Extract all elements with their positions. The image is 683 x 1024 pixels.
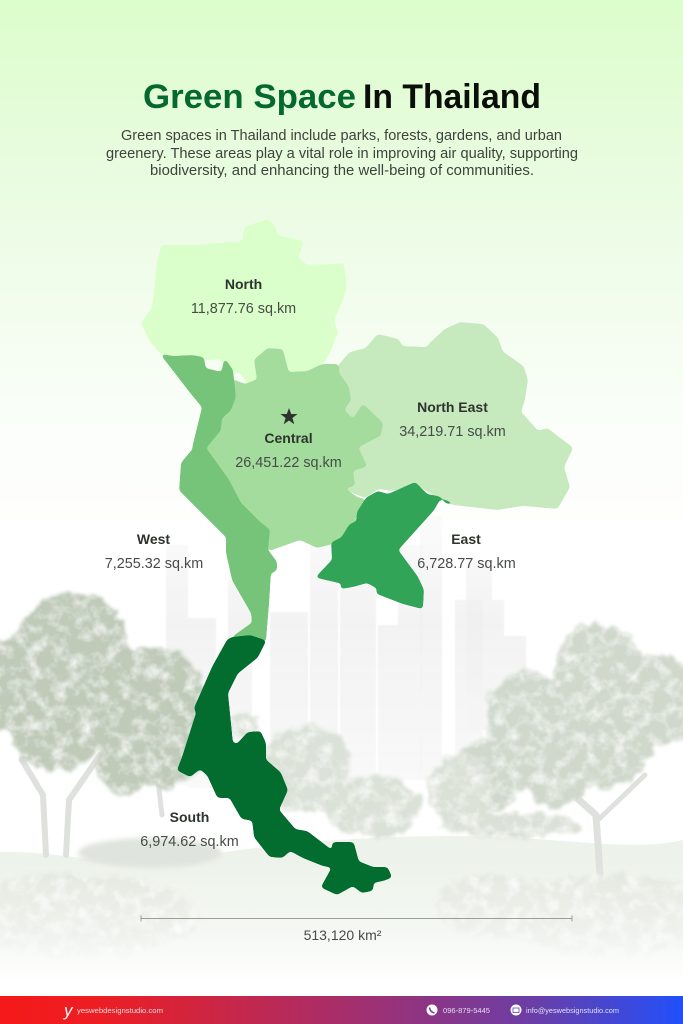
icon: phone	[426, 1004, 438, 1016]
intro paragraph: biodiversity, and enhancing the well-being of communities.	[150, 163, 534, 179]
region: West	[162, 355, 276, 641]
title: Green Space	[143, 78, 356, 116]
intro paragraph: greenery. These areas play a vital role in improving air quality, supporting	[106, 146, 578, 162]
label: Central: 26,451.22 sq.km	[235, 455, 342, 471]
background: foreground hedges	[0, 873, 683, 957]
label: East	[417, 531, 516, 572]
footer email: info@yeswebsignstudio.com	[526, 1006, 619, 1015]
background: right tree	[454, 624, 683, 811]
footer bar	[0, 996, 683, 1024]
background: ground and hills	[0, 836, 683, 990]
label: North East: 34,219.71 sq.km	[399, 424, 506, 440]
label: Central	[235, 430, 342, 471]
region: East	[317, 483, 453, 608]
title	[143, 78, 541, 116]
footer website: yeswebdesignstudio.com	[77, 1006, 163, 1015]
icon: mail	[510, 1004, 522, 1016]
label: South: 6,974.62 sq.km	[140, 834, 239, 850]
scale bar	[141, 916, 572, 943]
label: North East: North East	[417, 399, 488, 415]
title: In Thailand	[363, 78, 541, 116]
background: middle bushes	[227, 712, 580, 837]
intro paragraph	[106, 128, 578, 179]
map of Thailand	[142, 220, 572, 894]
region: North	[142, 220, 346, 385]
label: West: 7,255.32 sq.km	[105, 556, 203, 572]
label: West	[105, 531, 203, 572]
footer logo: y	[63, 1001, 74, 1020]
background: tree trunks	[22, 755, 645, 875]
background: city skyline	[166, 515, 526, 788]
region: South	[178, 636, 391, 894]
label: East: 6,728.77 sq.km	[417, 556, 516, 572]
intro paragraph: Green spaces in Thailand include parks, forests, gardens, and urban	[121, 128, 562, 144]
label: North: 11,877.76 sq.km	[191, 301, 296, 317]
label: South: South	[170, 809, 209, 825]
label: North East	[399, 399, 506, 440]
label: North	[191, 276, 296, 317]
background: bottom fade	[0, 860, 683, 997]
region: Central	[205, 349, 382, 550]
label: East: East	[451, 531, 481, 547]
footer phone number: 096-879-5445	[443, 1006, 490, 1015]
scale bar: 513,120 km²	[304, 927, 382, 943]
label: Central: Central	[264, 430, 313, 446]
icon: capital star	[280, 408, 298, 424]
label: South	[140, 809, 239, 850]
background: left trees	[0, 594, 205, 793]
region: North East	[338, 323, 572, 509]
label: North: North	[225, 276, 262, 292]
label: West: West	[137, 531, 170, 547]
